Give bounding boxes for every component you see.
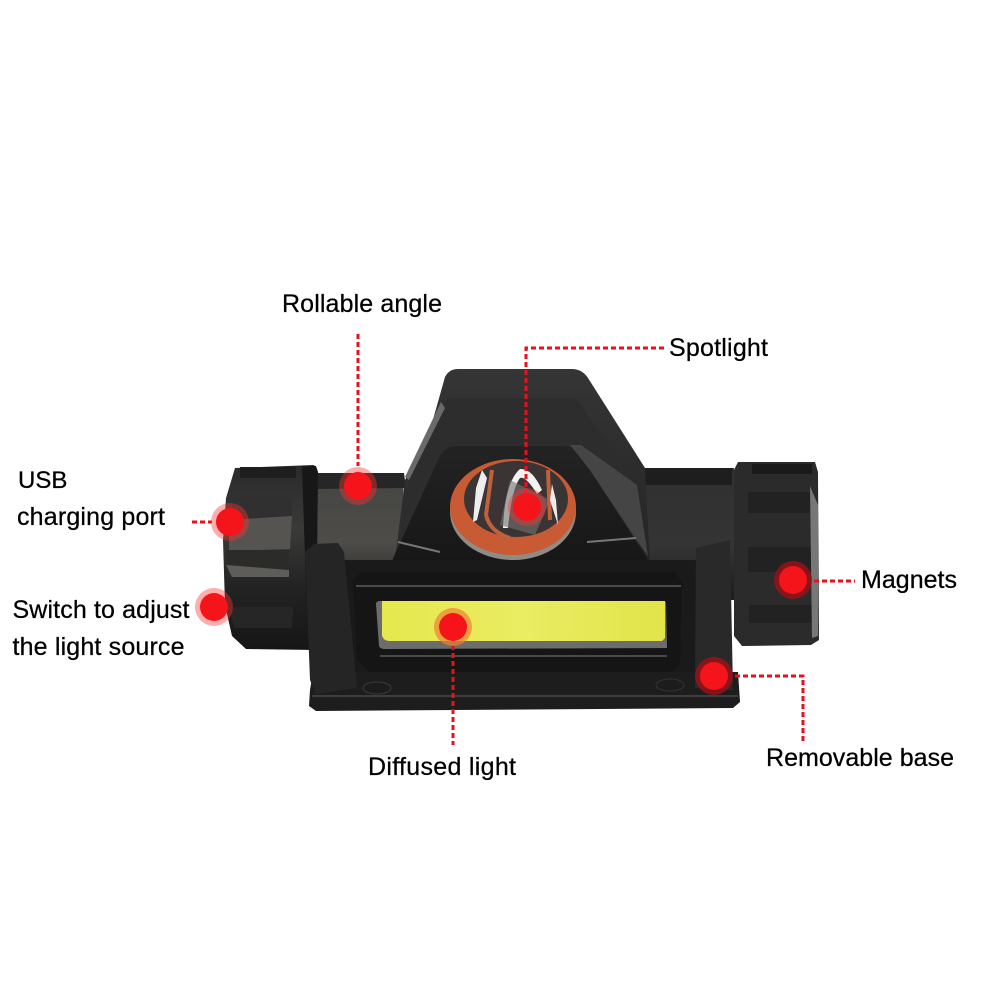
left wing bbox=[305, 543, 357, 694]
COB LED strip bbox=[382, 601, 665, 641]
base plate bbox=[309, 672, 740, 711]
callout: magnets bbox=[774, 561, 957, 599]
left knob bbox=[223, 465, 318, 650]
callout: diffused light: Diffused light bbox=[368, 753, 516, 781]
top bracket bbox=[390, 369, 650, 580]
callout: USB charging port: USB bbox=[18, 467, 67, 494]
callout: removable base: Removable base bbox=[766, 744, 954, 772]
callout: light source switch: Switch to adjust bbox=[12, 596, 190, 624]
callout: light source switch: the light source bbox=[12, 633, 184, 661]
lower housing bbox=[340, 560, 705, 692]
callout: light source switch bbox=[12, 588, 233, 661]
headlamp product photo bbox=[223, 369, 819, 711]
callout: magnets: Magnets bbox=[861, 566, 957, 594]
callout: removable base bbox=[695, 657, 954, 772]
callout: spotlight: Spotlight bbox=[669, 334, 768, 362]
right wing bbox=[695, 540, 733, 690]
right knob bbox=[734, 462, 819, 646]
callout: diffused light bbox=[368, 608, 516, 781]
callout: USB charging port bbox=[17, 467, 249, 541]
right barrel bbox=[636, 468, 734, 600]
spotlight lens with orange ring bbox=[450, 459, 576, 560]
left barrel bbox=[312, 473, 406, 590]
callout: rollable angle: Rollable angle bbox=[282, 290, 442, 318]
lamp panel bbox=[353, 572, 682, 672]
screw holes bbox=[363, 679, 684, 694]
callout: rollable angle bbox=[282, 290, 442, 505]
callout: USB charging port: charging port bbox=[17, 503, 165, 531]
callout: spotlight bbox=[508, 334, 768, 526]
